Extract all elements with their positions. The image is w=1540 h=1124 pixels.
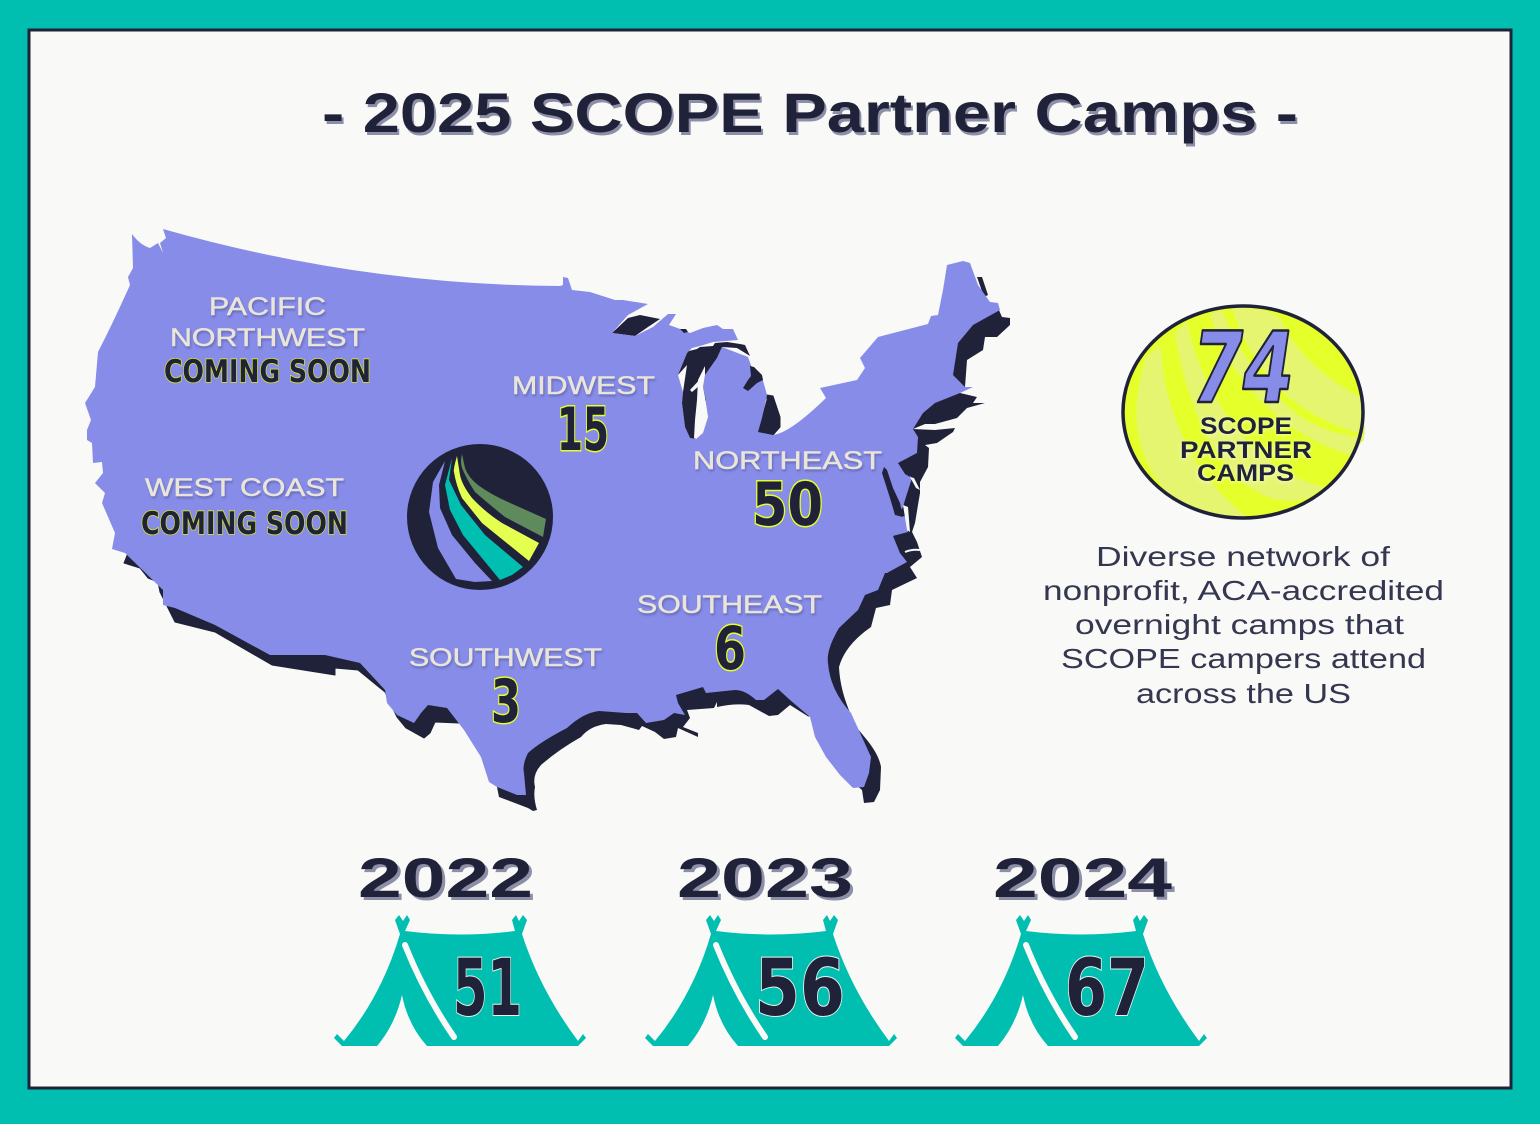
map land bbox=[85, 229, 1000, 795]
lake michigan shadow bbox=[678, 342, 750, 439]
region label: southwest: 3 bbox=[491, 667, 521, 737]
outer banks water bbox=[905, 550, 920, 552]
icon: tent bbox=[645, 915, 897, 1046]
description text: across the US bbox=[1136, 678, 1351, 709]
outer banks shadow bbox=[893, 532, 917, 553]
description text: SCOPE campers attend bbox=[1061, 643, 1426, 674]
region label: northeast: 50 bbox=[752, 470, 823, 540]
region label: pacific northwest: NORTHWEST bbox=[170, 324, 365, 352]
region label: southeast: 6 bbox=[714, 614, 746, 684]
map shadow: lake erie and huron bbox=[758, 395, 780, 435]
region label: southwest: SOUTHWEST bbox=[409, 644, 602, 672]
title: - 2025 SCOPE Partner Camps - bbox=[322, 81, 1298, 144]
badge outline bbox=[1123, 306, 1363, 518]
region label: pacific northwest: PACIFIC bbox=[209, 293, 326, 321]
delaware water bbox=[910, 477, 920, 490]
description text: nonprofit, ACA-accredited bbox=[1043, 575, 1444, 606]
saginaw bay shadow bbox=[743, 366, 763, 391]
region label: west coast: WEST COAST bbox=[145, 474, 344, 502]
year label: 2023 bbox=[677, 846, 853, 909]
year label: 2024 bbox=[993, 846, 1172, 909]
region label: northeast: NORTHEAST bbox=[693, 447, 882, 475]
lake michigan water bbox=[694, 366, 708, 439]
map shadow: west and south bbox=[124, 540, 470, 738]
description text: overnight camps that bbox=[1075, 609, 1404, 640]
year label: 2022 bbox=[358, 846, 533, 909]
delaware bay shadow bbox=[898, 463, 910, 477]
icon: scope logo bbox=[407, 444, 553, 590]
map shadow: maine edge bbox=[977, 277, 988, 297]
badge caption: PARTNER bbox=[1180, 437, 1312, 464]
icon: tent bbox=[955, 915, 1207, 1046]
small superior shadow bbox=[680, 329, 688, 333]
region label: west coast: COMING SOON bbox=[141, 506, 348, 542]
green bay water sliver bbox=[690, 376, 703, 392]
year 2023 tent bbox=[645, 846, 897, 1046]
description text: Diverse network of bbox=[1096, 541, 1390, 572]
region label: southeast: SOUTHEAST bbox=[637, 591, 822, 619]
region label: southwest bbox=[409, 644, 602, 737]
badge light stripes bbox=[1137, 307, 1365, 518]
icon: tent bbox=[334, 915, 586, 1046]
region label: northeast bbox=[693, 447, 882, 540]
callout badge: 74 partner camps bbox=[1123, 306, 1365, 518]
badge caption bbox=[1180, 413, 1312, 487]
region label: pacific northwest: COMING SOON bbox=[164, 354, 371, 390]
chesapeake bay shadow bbox=[882, 467, 903, 517]
region label: midwest bbox=[512, 372, 655, 465]
region label: southeast bbox=[637, 591, 822, 684]
region label: midwest: 15 bbox=[557, 395, 609, 465]
year 2024 tent bbox=[955, 846, 1207, 1046]
badge number: 74 bbox=[1192, 312, 1294, 426]
camp count: 67 bbox=[1065, 944, 1149, 1034]
region label: west coast bbox=[141, 474, 348, 542]
description text bbox=[1043, 541, 1444, 709]
chesapeake water bbox=[903, 505, 910, 532]
badge caption: CAMPS bbox=[1197, 460, 1294, 487]
map shadow: east coast bbox=[800, 308, 1010, 715]
badge caption: SCOPE bbox=[1200, 413, 1292, 440]
map shadow: gulf coast bbox=[490, 680, 809, 811]
year 2022 tent bbox=[334, 846, 586, 1046]
camp count: 51 bbox=[453, 944, 522, 1034]
region label: midwest: MIDWEST bbox=[512, 372, 655, 400]
map shadow: lake superior bbox=[612, 315, 660, 336]
region label: pacific northwest bbox=[164, 293, 371, 390]
camp count: 56 bbox=[755, 944, 845, 1034]
US map bbox=[85, 229, 1010, 811]
map shadow: florida bbox=[850, 713, 881, 803]
